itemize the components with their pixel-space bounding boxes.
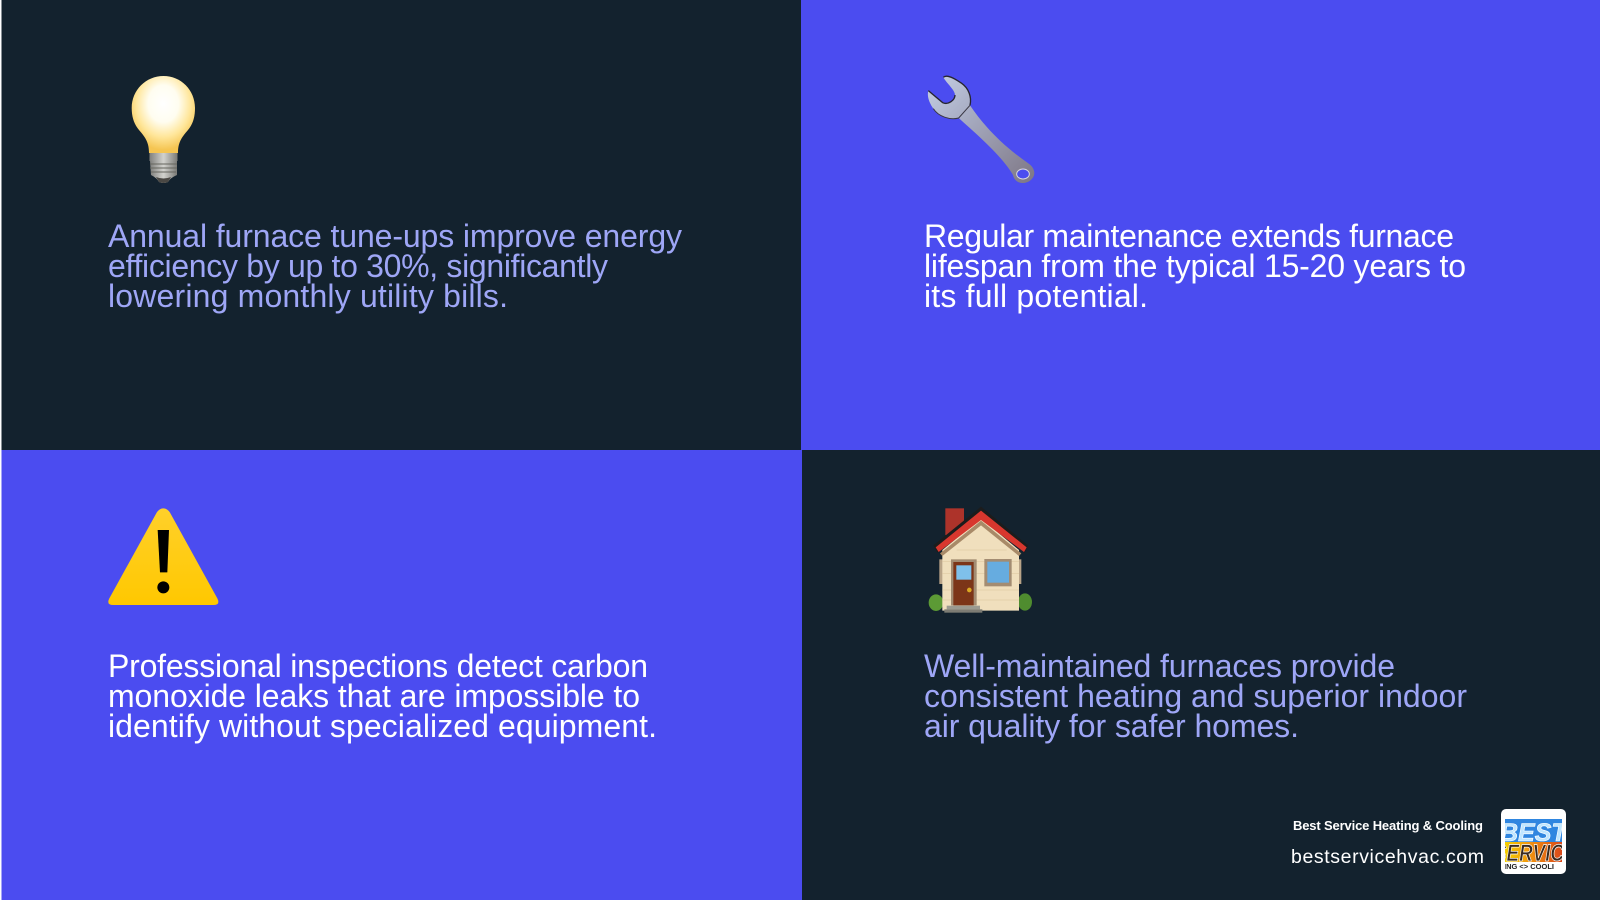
panel: carbon monoxide safety bbox=[0, 450, 802, 900]
text: furnace lifespan: Regular maintenance extends furnace bbox=[924, 218, 1454, 254]
logo: Best Service badge: ING <> COOLI bbox=[1504, 862, 1554, 871]
footer: brand name and website: Best Service Heating & Cooling bbox=[1293, 818, 1483, 833]
text: energy efficiency bbox=[108, 218, 682, 314]
text: safer homes: air quality for safer homes. bbox=[924, 708, 1299, 744]
text: furnace lifespan: lifespan from the typical 15-20 years to bbox=[924, 248, 1466, 284]
text: carbon monoxide safety: identify without specialized equipment. bbox=[108, 708, 657, 744]
text: furnace lifespan bbox=[924, 218, 1466, 314]
text: energy efficiency: lowering monthly utility bills. bbox=[108, 278, 508, 314]
logo: Best Service badge: SERVIC bbox=[1494, 840, 1565, 867]
text: safer homes bbox=[924, 648, 1467, 744]
text: energy efficiency: efficiency by up to 30%, significantly bbox=[108, 248, 608, 284]
panel: energy efficiency bbox=[0, 0, 801, 450]
logo: Best Service badge: BEST bbox=[1500, 819, 1569, 847]
text: carbon monoxide safety: monoxide leaks that are impossible to bbox=[108, 678, 640, 714]
icon: house bbox=[929, 507, 1032, 613]
text: safer homes: Well-maintained furnaces provide bbox=[924, 648, 1395, 684]
icon: light bulb bbox=[132, 76, 195, 183]
left edge sliver bbox=[0, 0, 2, 900]
icon: warning triangle bbox=[108, 508, 218, 605]
panel: furnace lifespan bbox=[801, 0, 1600, 450]
text: carbon monoxide safety bbox=[108, 648, 657, 744]
icon: wrench bbox=[928, 76, 1034, 183]
text: carbon monoxide safety: Professional inspections detect carbon bbox=[108, 648, 648, 684]
panel: safer homes bbox=[802, 450, 1600, 900]
footer: brand name and website: bestservicehvac.com bbox=[1291, 846, 1484, 868]
text: energy efficiency: Annual furnace tune-ups improve energy bbox=[108, 218, 682, 254]
footer: brand name and website bbox=[1291, 818, 1484, 868]
logo: Best Service badge bbox=[1501, 809, 1566, 874]
text: furnace lifespan: its full potential. bbox=[924, 278, 1148, 314]
text: safer homes: consistent heating and superior indoor bbox=[924, 678, 1467, 714]
